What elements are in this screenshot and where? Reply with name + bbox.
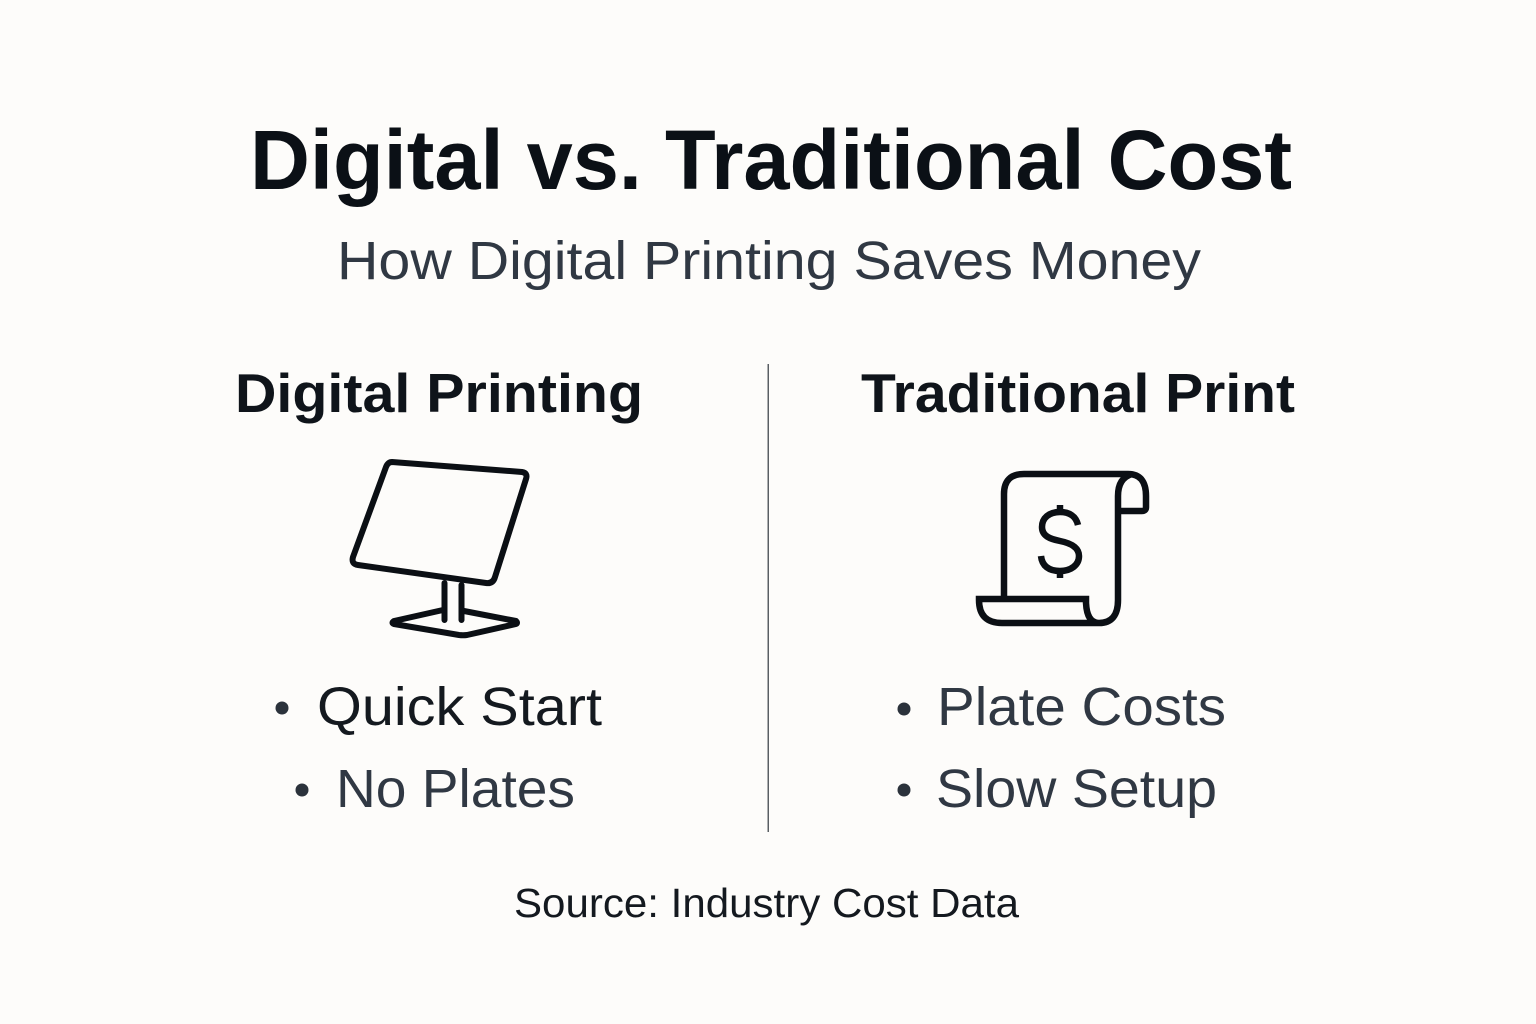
panel: digital printing bbox=[235, 362, 643, 819]
bullet list: traditional drawbacks bbox=[898, 677, 1226, 819]
bullet: no plates: No Plates bbox=[336, 759, 575, 819]
subtitle: How Digital Printing Saves Money bbox=[337, 231, 1201, 291]
bullet: plate costs: Plate Costs bbox=[937, 677, 1226, 737]
heading: digital printing: Digital Printing bbox=[235, 362, 643, 424]
source note: Source: Industry Cost Data bbox=[514, 880, 1019, 926]
bullet: quick start: Quick Start bbox=[317, 677, 602, 737]
title: Digital vs. Traditional Cost bbox=[250, 113, 1292, 207]
icon: monitor bbox=[353, 462, 526, 635]
column divider bbox=[768, 364, 769, 832]
panel: traditional print bbox=[861, 362, 1295, 819]
heading: traditional print: Traditional Print bbox=[861, 362, 1295, 424]
icon: invoice scroll with dollar sign bbox=[979, 474, 1146, 623]
bullet: slow setup: Slow Setup bbox=[936, 759, 1217, 819]
bullet list: digital benefits bbox=[276, 677, 602, 819]
